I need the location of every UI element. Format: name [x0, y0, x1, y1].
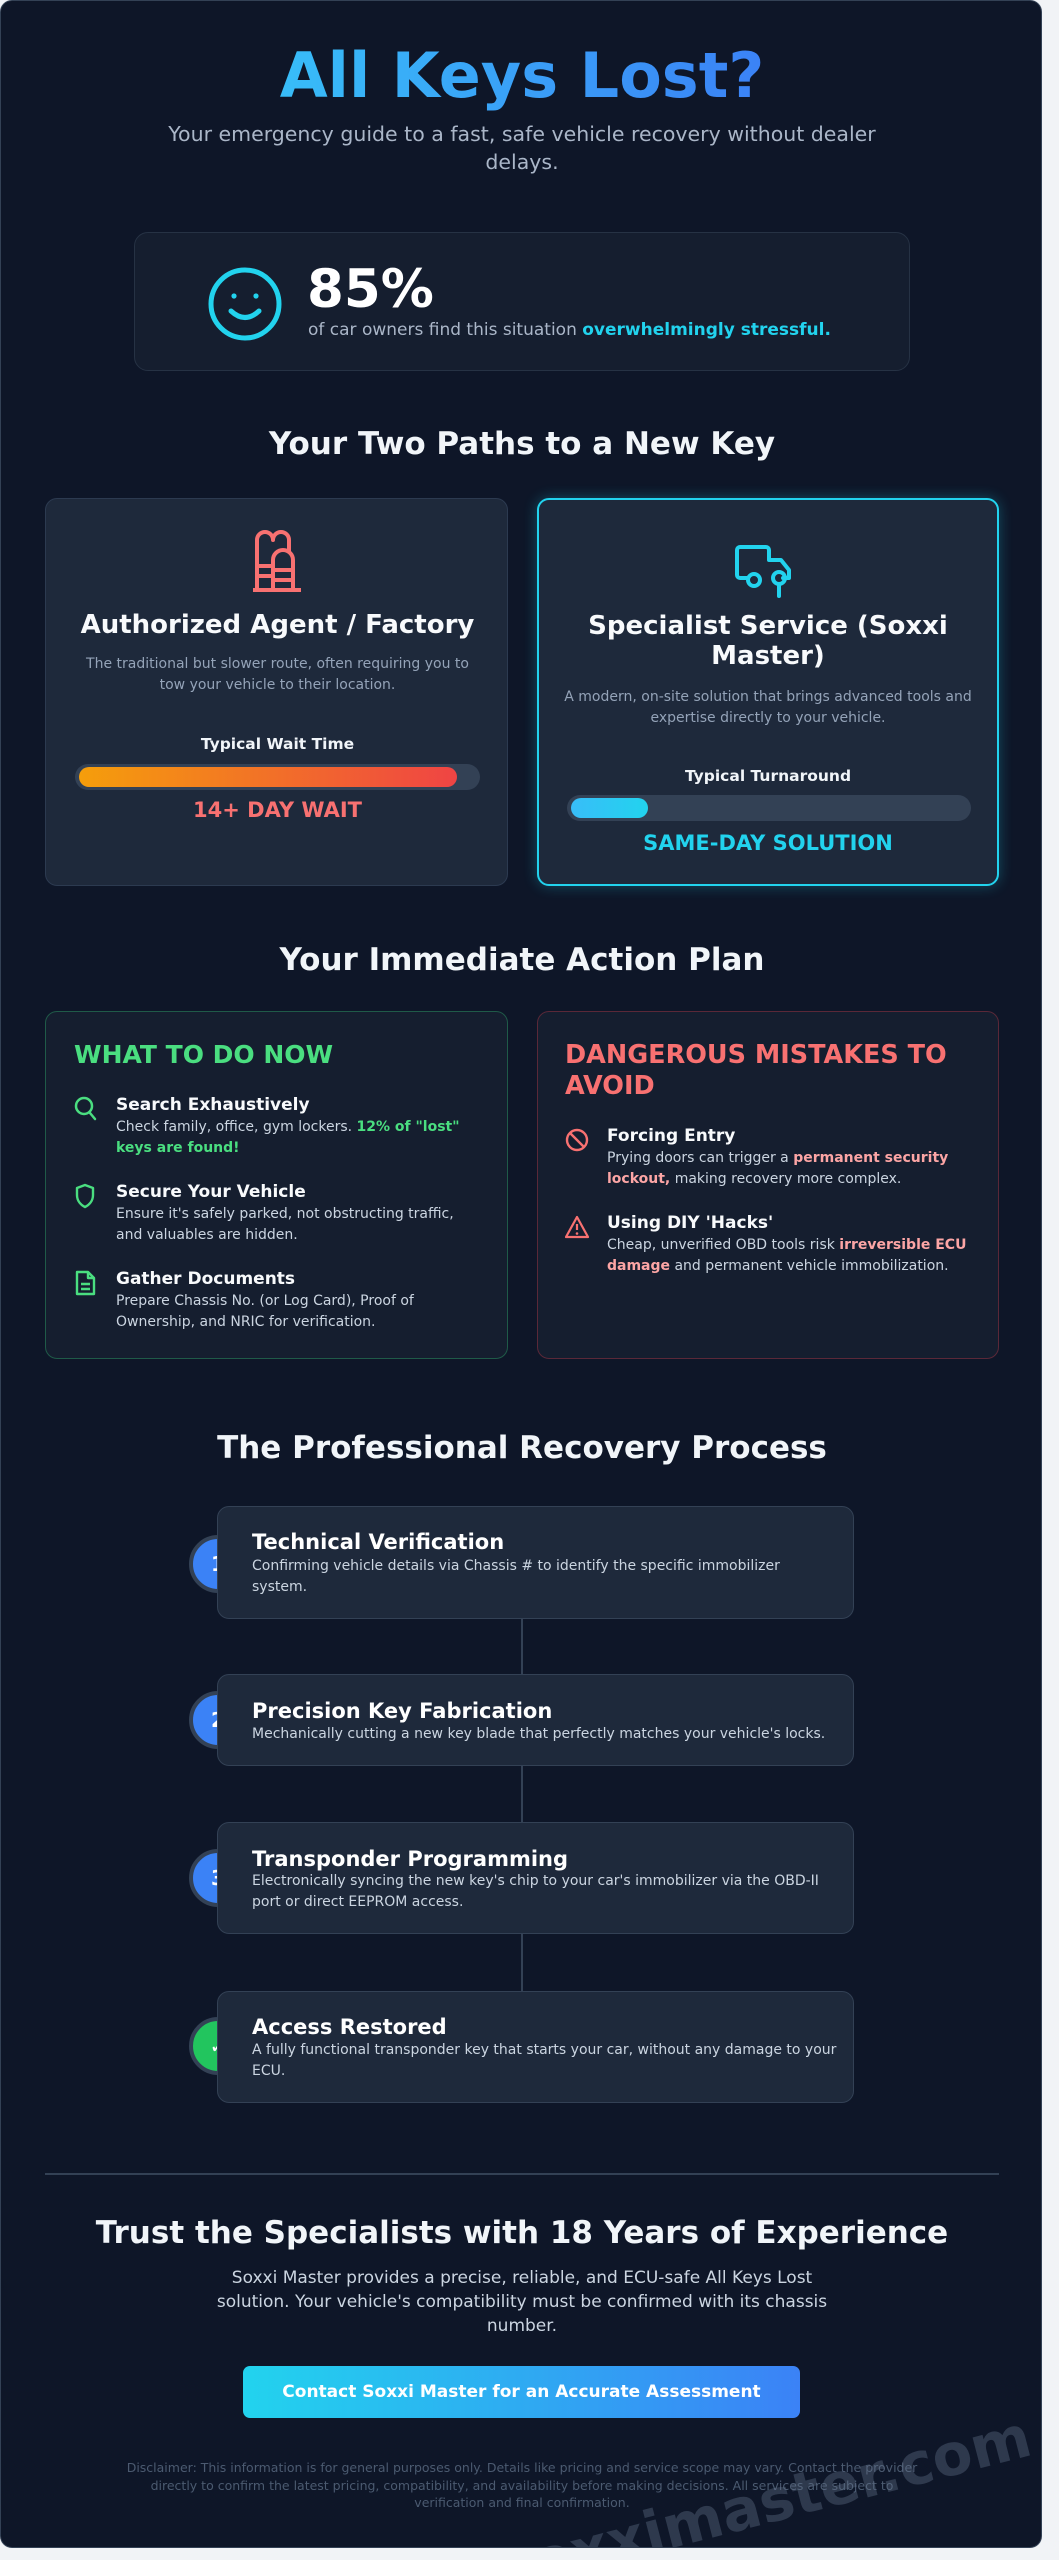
button [243, 2366, 800, 2418]
title: All Keys Lost? [280, 39, 764, 112]
circle 1 [189, 1535, 247, 1593]
heading: trust: Trust the Specialists with 18 Years of Experience [96, 2215, 948, 2251]
step 2: Precision Key Fabrication [252, 1699, 552, 1723]
item: diy hacks: Using DIY 'Hacks' [607, 1213, 773, 1233]
item: diy hacks: damage and permanent vehicle immobilization. [607, 1258, 949, 1274]
circle 3: 3 [211, 1866, 225, 1890]
heading: AVOID [565, 1071, 655, 1101]
step 2 [189, 1674, 854, 1766]
subtitle: delays. [485, 150, 559, 174]
step 3: Transponder Programming [252, 1847, 568, 1871]
icon: document [76, 1270, 96, 1296]
trust text: solution. Your vehicle's compatibility must be confirmed with its chassis [217, 2292, 827, 2312]
stat text: of car owners find this situation overwhelmingly stressful. [308, 320, 831, 340]
step 1: Technical Verification [252, 1530, 504, 1554]
bar: same day [567, 795, 971, 821]
bar: 14 days [75, 764, 480, 790]
disclaimer [127, 2460, 918, 2510]
item: documents: Ownership, and NRIC for verification. [116, 1314, 376, 1330]
description [564, 689, 972, 726]
heading: action plan: Your Immediate Action Plan [280, 942, 764, 978]
trust text [217, 2268, 827, 2336]
item: secure [76, 1182, 454, 1242]
heading: two paths: Your Two Paths to a New Key [269, 426, 775, 462]
subtitle: Your emergency guide to a fast, safe vehicle recovery without dealer [168, 122, 876, 146]
description: expertise directly to your vehicle. [650, 710, 886, 726]
disclaimer: directly to confirm the latest pricing, compatibility, and availability before making decisions. All services are subject to [151, 2478, 893, 2492]
step 4: A fully functional transponder key that starts your car, without any damage to your [252, 2042, 836, 2058]
trust text: Soxxi Master provides a precise, reliable, and ECU-safe All Keys Lost [232, 2268, 812, 2288]
item: secure: and valuables are hidden. [116, 1226, 298, 1242]
item: secure: Ensure it's safely parked, not obstructing traffic, [116, 1206, 454, 1222]
step 2: Mechanically cutting a new key blade that perfectly matches your vehicle's locks. [252, 1726, 825, 1742]
value: SAME-DAY SOLUTION [643, 831, 893, 855]
step 3: port or direct EEPROM access. [252, 1894, 463, 1910]
item: search: keys are found! [116, 1140, 240, 1156]
title [588, 611, 948, 671]
heading: recovery process: The Professional Recovery Process [217, 1430, 827, 1466]
heading [565, 1040, 947, 1101]
item: search [74, 1095, 460, 1156]
step 1: system. [252, 1579, 307, 1595]
step 3: Electronically syncing the new key's chip to your car's immobilizer via the OBD-II [252, 1873, 819, 1889]
item: forcing entry [566, 1126, 948, 1186]
disclaimer: verification and final confirmation. [414, 2495, 630, 2510]
disclaimer: Disclaimer: This information is for general purposes only. Details like pricing and service scope may vary. Contact the provider [127, 2460, 917, 2475]
circle 4 [189, 2017, 247, 2075]
title: Master) [711, 641, 825, 671]
circle 3 [189, 1849, 247, 1907]
item: search: Check family, office, gym lockers. 12% of "lost" [116, 1119, 460, 1135]
item: documents: Gather Documents [116, 1269, 295, 1289]
icon: search [74, 1096, 96, 1120]
item: secure: Secure Your Vehicle [116, 1182, 306, 1202]
step 1 [189, 1506, 854, 1619]
description [86, 656, 469, 693]
step 4: ECU. [252, 2063, 285, 2079]
panel: authorized agent [45, 498, 508, 886]
circle 2 [189, 1691, 247, 1749]
icon: shield [76, 1184, 94, 1208]
trust text: number. [487, 2316, 557, 2336]
icon: warning [565, 1216, 590, 1238]
step 3 [189, 1822, 854, 1934]
title: Authorized Agent / Factory [81, 610, 474, 640]
heading: DANGEROUS MISTAKES TO [565, 1040, 947, 1070]
item: forcing entry: Prying doors can trigger a permanent security [607, 1150, 948, 1166]
label: Typical Wait Time [201, 735, 354, 753]
panel: dangerous mistakes [537, 1011, 999, 1359]
item: documents: Prepare Chassis No. (or Log Card), Proof of [116, 1293, 414, 1309]
circle 2: 2 [211, 1708, 225, 1732]
step 4 [189, 1991, 854, 2103]
title: Specialist Service (Soxxi [588, 611, 948, 641]
item: forcing entry: Forcing Entry [607, 1126, 735, 1146]
item: search: Search Exhaustively [116, 1095, 310, 1115]
button: Contact Soxxi Master for an Accurate Assessment [282, 2382, 761, 2402]
description: tow your vehicle to their location. [160, 677, 395, 693]
step 4: Access Restored [252, 2015, 447, 2039]
item: documents [76, 1269, 414, 1330]
connector line [521, 1619, 523, 1991]
icon: smiley [208, 268, 282, 340]
value: 14+ DAY WAIT [193, 798, 362, 822]
circle 1: 1 [211, 1552, 225, 1576]
circle 4: ✓ [210, 2034, 226, 2058]
item: forcing entry: lockout, making recovery more complex. [607, 1170, 901, 1186]
description: A modern, on-site solution that brings advanced tools and [564, 689, 972, 705]
subtitle [168, 122, 876, 174]
item: diy hacks [565, 1213, 966, 1274]
step 1: Confirming vehicle details via Chassis # to identify the specific immobilizer [252, 1558, 780, 1574]
stat number: 85% [307, 259, 434, 320]
panel: specialist [537, 498, 999, 886]
label: Typical Turnaround [685, 767, 851, 785]
description: The traditional but slower route, often requiring you to [86, 656, 469, 672]
icon: building [253, 530, 301, 592]
heading: WHAT TO DO NOW [74, 1040, 333, 1069]
icon: no entry [566, 1128, 588, 1152]
stat box [134, 232, 910, 371]
item: diy hacks: Cheap, unverified OBD tools risk irreversible ECU [607, 1237, 966, 1253]
icon: service van [735, 545, 791, 598]
panel: what to do now [45, 1011, 508, 1359]
